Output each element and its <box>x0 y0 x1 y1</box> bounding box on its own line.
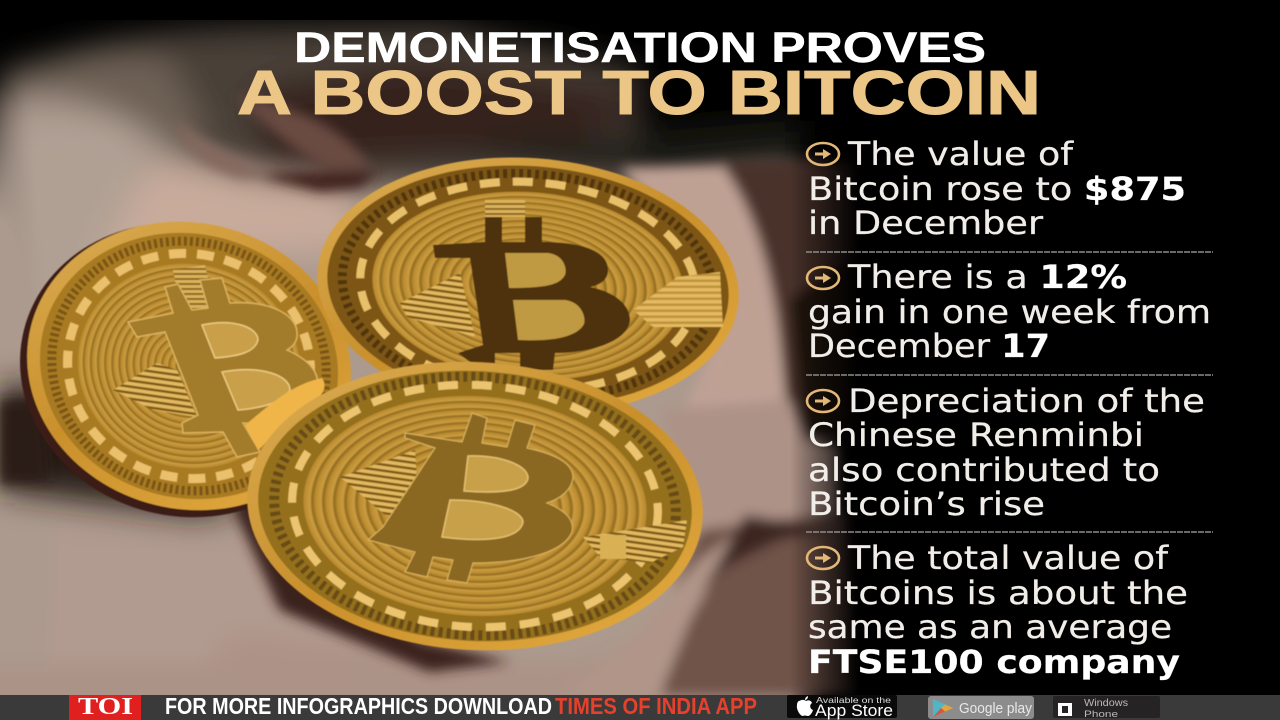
badge: Windows Phone: Windows <box>1084 698 1128 709</box>
badge: Windows Phone <box>1053 696 1160 720</box>
right fingers <box>620 165 785 420</box>
point 3: Renminbi <box>807 382 1205 523</box>
circuit detail <box>400 273 475 337</box>
logo: TOI <box>69 694 141 720</box>
point 1: value of Bitcoin: in December <box>808 204 1044 242</box>
coin symbol: front bitcoin mark <box>368 413 573 583</box>
circuit detail <box>340 450 420 520</box>
coin symbol: back bitcoin mark <box>433 217 630 370</box>
badge: Google play: Google play <box>959 700 1032 717</box>
point 2: weekly gain: There is a 12% <box>847 258 1127 296</box>
title <box>237 24 1041 128</box>
point 3: Renminbi: Bitcoin’s rise <box>808 485 1045 523</box>
title line 2: A BOOST TO BITCOIN <box>237 59 1041 128</box>
icon: arrow circle <box>807 143 839 165</box>
point 3: Renminbi: Chinese Renminbi <box>808 416 1144 454</box>
icon: arrow circle <box>807 267 839 289</box>
point 1: value of Bitcoin: Bitcoin rose to $875 <box>808 170 1186 208</box>
point 2: weekly gain <box>807 258 1211 365</box>
icon: arrow circle <box>807 390 839 412</box>
coin highlight <box>245 378 324 450</box>
point 1: value of Bitcoin <box>807 135 1186 242</box>
point 3: Renminbi: also contributed to <box>808 451 1160 489</box>
badge: App Store: Available on the <box>816 696 892 705</box>
point 4: total value <box>807 539 1188 681</box>
footer message: FOR MORE INFOGRAPHICS DOWNLOAD <box>165 693 552 719</box>
coin: front <box>240 350 710 662</box>
coin symbol: left bitcoin mark <box>128 278 318 457</box>
text panel: key points <box>806 135 1213 681</box>
point 4: total value: Bitcoins is about the <box>808 574 1188 612</box>
footer app name: TIMES OF INDIA APP <box>555 693 757 719</box>
badge: Google play <box>928 696 1034 719</box>
point 2: weekly gain: December 17 <box>808 327 1050 365</box>
coin: back <box>309 144 747 428</box>
skin edge strips <box>0 85 60 700</box>
badge: App Store <box>787 695 897 720</box>
title line 1: DEMONETISATION PROVES <box>294 24 986 72</box>
icon: arrow circle <box>807 547 839 569</box>
badge: App Store: App Store <box>815 701 893 720</box>
point 2: weekly gain: gain in one week from <box>808 293 1211 331</box>
circuit detail <box>113 363 197 417</box>
logo: TOI: TOI <box>78 694 133 720</box>
badge: Windows Phone: Phone <box>1084 709 1118 720</box>
point 4: total value: same as an average <box>808 608 1172 646</box>
footer bar <box>0 693 1280 720</box>
point 4: total value: The total value of <box>847 539 1169 577</box>
coin: left <box>0 188 382 552</box>
point 1: value of Bitcoin: The value of <box>847 135 1074 173</box>
point 3: Renminbi: Depreciation of the <box>848 382 1205 420</box>
point 4: total value: FTSE100 company <box>808 643 1180 681</box>
